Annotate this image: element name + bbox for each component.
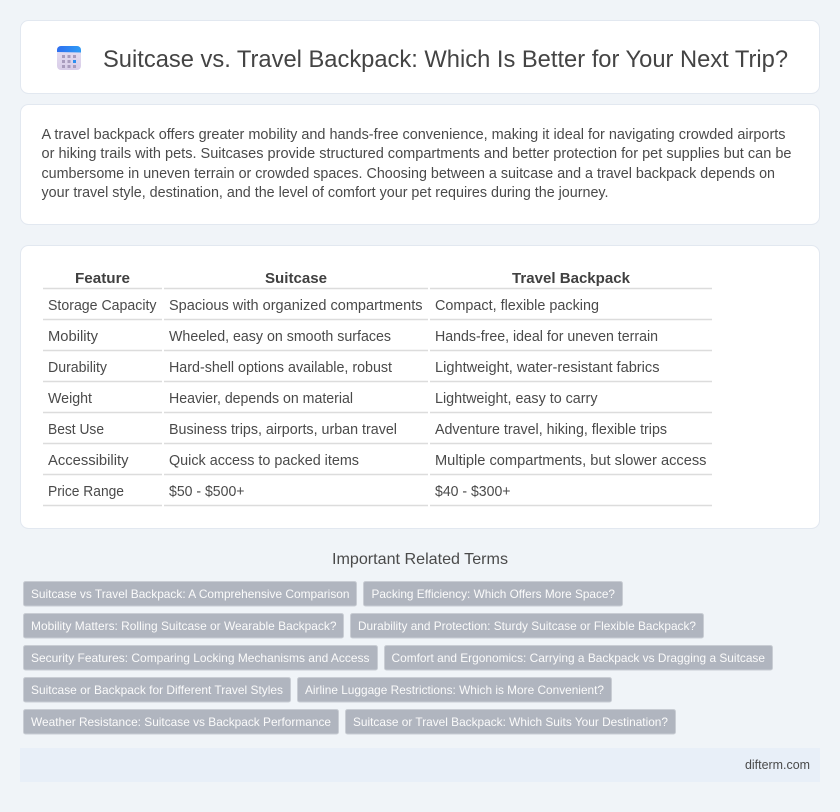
row: storage capacity: Storage Capacity	[48, 298, 157, 314]
tag	[384, 646, 772, 670]
title: Suitcase vs. Travel Backpack: Which Is Better for Your Next Trip?	[103, 46, 788, 73]
table header row: Feature	[75, 270, 130, 287]
footer bar	[20, 748, 820, 782]
tag: Durability and Protection: Sturdy Suitcase or Flexible Backpack?	[358, 619, 696, 633]
row: weight: Heavier, depends on material	[169, 391, 353, 407]
tag: Suitcase or Backpack for Different Travel Styles	[31, 683, 283, 697]
intro paragraph: or hiking trails with pets. Suitcases provide structured compartments and better protection for pet supplies but can be	[42, 146, 792, 162]
table header row: Suitcase	[265, 270, 327, 287]
tag	[350, 614, 704, 638]
tag	[24, 614, 344, 638]
row: mobility: Hands-free, ideal for uneven terrain	[435, 329, 658, 345]
row: accessibility: Multiple compartments, but slower access	[435, 453, 706, 469]
tag	[346, 710, 676, 734]
row: best use: Best Use	[48, 422, 104, 438]
tag	[24, 646, 378, 670]
tag: Packing Efficiency: Which Offers More Space?	[372, 587, 615, 601]
tag: Suitcase or Travel Backpack: Which Suits Your Destination?	[353, 715, 668, 729]
row: durability: Hard-shell options available, robust	[169, 360, 392, 376]
icon: calendar	[57, 46, 81, 70]
panel: comparison table	[20, 246, 820, 528]
row: mobility: Mobility	[48, 329, 99, 345]
tag: Suitcase vs Travel Backpack: A Comprehensive Comparison	[31, 587, 350, 601]
row: best use: Business trips, airports, urban travel	[169, 422, 397, 438]
tag: Mobility Matters: Rolling Suitcase or Wearable Backpack?	[31, 619, 337, 633]
row: accessibility	[43, 453, 712, 474]
table header row	[43, 270, 712, 288]
table header row: Travel Backpack	[512, 270, 631, 287]
panel: introduction	[20, 104, 820, 224]
row: price range: $40 - $300+	[435, 484, 510, 500]
heading: important related terms: Important Related Terms	[332, 551, 508, 568]
row: price range: Price Range	[48, 484, 124, 500]
row: mobility: Wheeled, easy on smooth surfaces	[169, 329, 391, 345]
row: durability: Lightweight, water-resistant fabrics	[435, 360, 660, 376]
row: accessibility: Accessibility	[48, 453, 129, 469]
row: best use	[43, 422, 712, 444]
row: accessibility: Quick access to packed items	[169, 453, 359, 469]
row: mobility	[43, 329, 712, 350]
tag: Weather Resistance: Suitcase vs Backpack Performance	[31, 715, 331, 729]
row: durability	[43, 360, 712, 382]
row: price range: $50 - $500+	[169, 484, 244, 500]
tag	[24, 678, 290, 702]
intro paragraph: A travel backpack offers greater mobility and hands-free convenience, making it ideal for navigating crowded airports	[42, 127, 786, 143]
tag: Comfort and Ergonomics: Carrying a Backpack vs Dragging a Suitcase	[392, 651, 765, 665]
related terms tags	[24, 582, 772, 734]
row: price range	[43, 484, 712, 506]
tag	[24, 582, 356, 606]
row: best use: Adventure travel, hiking, flexible trips	[435, 422, 667, 438]
tag: Security Features: Comparing Locking Mechanisms and Access	[31, 651, 370, 665]
row: storage capacity	[43, 298, 712, 320]
tag	[298, 678, 612, 702]
row: storage capacity: Compact, flexible packing	[435, 298, 599, 314]
tag	[364, 582, 622, 606]
intro paragraph: cumbersome in uneven terrain or crowded spaces. Choosing between a suitcase and a travel backpack depends on	[42, 166, 775, 182]
row: weight: Weight	[48, 391, 92, 407]
intro paragraph	[42, 127, 792, 201]
intro paragraph: your travel style, destination, and the level of comfort your pet requires during the journey.	[42, 185, 608, 201]
row: weight: Lightweight, easy to carry	[435, 391, 598, 407]
header panel	[20, 20, 820, 94]
row: weight	[43, 391, 712, 412]
row: durability: Durability	[48, 360, 108, 376]
tag	[24, 710, 338, 734]
row: storage capacity: Spacious with organized compartments	[169, 298, 422, 314]
footer site name: difterm.com	[745, 758, 810, 772]
tag: Airline Luggage Restrictions: Which is More Convenient?	[305, 683, 604, 697]
